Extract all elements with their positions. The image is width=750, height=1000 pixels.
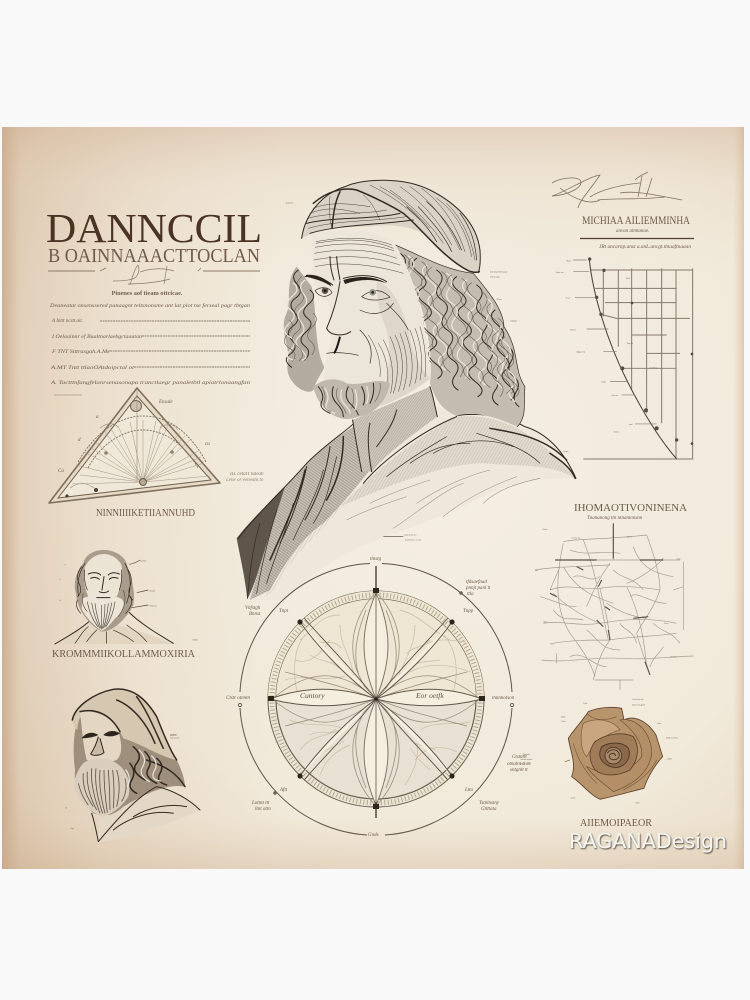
triangle instrument diagram: IIL cetalT tuleab [229, 472, 264, 477]
curve and grid chart: Tbnpr fttt [627, 342, 634, 345]
compass rose diagram: Ctstnttt [512, 755, 527, 760]
compass rose diagram: otnatnt tt rt [507, 762, 530, 767]
rose illustration: Lptnn [656, 722, 661, 725]
small portrait caption: KROMMMIIKOLLAMMOXIRIA [52, 648, 195, 660]
hooded bearded portrait [64, 689, 200, 842]
head cap [302, 180, 480, 273]
rose illustration: Grtltn [561, 720, 566, 723]
curve and grid chart: Enatn ttn [611, 394, 618, 397]
compass rose diagram: tlnstg [370, 557, 382, 562]
rose illustration: Ettttat Oott. Tntla [665, 736, 678, 739]
rose illustration: Aptnan [570, 796, 576, 799]
compass rose diagram: Ltta [464, 788, 474, 793]
curve and grid chart: Bnstloe [614, 431, 619, 434]
hooded bearded portrait: Fte [64, 806, 67, 809]
compass rose diagram: Vnfstgh [245, 606, 261, 611]
compass rose diagram: sntgnlt tt [510, 768, 528, 773]
compass rose diagram: ltnt ottn [255, 807, 271, 812]
compass rose diagram: pnnjt panl tt [465, 586, 491, 591]
network map sketch: Ttn tnnttnn [670, 655, 677, 658]
compass rose diagram: Aftt [279, 788, 288, 793]
network map sketch: Pttnn [549, 643, 554, 646]
portrait callouts: t.ft fttffalat [510, 320, 518, 323]
watermark: RAGANADesign [569, 829, 727, 853]
main portrait [237, 180, 576, 600]
portrait callouts: Enstion Eatgrt [489, 275, 500, 278]
hooded bearded portrait: Jlott Ftuaa'nn [170, 736, 179, 739]
portrait callouts [286, 201, 518, 542]
small bearded portrait: % [59, 579, 61, 581]
triangle instrument diagram: cu [205, 442, 210, 447]
network map sketch: ptt atnas tstn [571, 536, 580, 539]
portrait callouts: A.naqnsnn tfott ttoa [402, 534, 417, 537]
triangle instrument diagram: Ca [58, 469, 64, 474]
small bearded portrait: Ttntnrtnwn [149, 604, 157, 607]
rose illustration: Ptnn tt ttat. tottt [632, 698, 644, 701]
network map sketch: Ptn ttn [663, 622, 669, 625]
rose illustration: atnagtn tlg ptttnt [520, 763, 532, 766]
compass rose diagram: tfdsaefnad [466, 580, 487, 585]
curve and grid chart: oPtgget pnrta [576, 351, 585, 354]
compass rose diagram: Tnpt [279, 609, 289, 614]
rose illustration: Ofttgptnttn [523, 753, 530, 756]
right map heading [574, 503, 687, 521]
rose illustration: Patnts [634, 802, 640, 805]
portrait callouts: Ipoft Bongbl Bonrtrpnrgtn [490, 271, 508, 274]
small bearded portrait: *A [64, 563, 67, 566]
title: B OAINNAAACTTOCLAN [48, 245, 260, 267]
small bearded portrait: Ttnttpnn [192, 639, 198, 642]
introduction text block: F TNT Stttrasgah.A.Me [51, 350, 111, 355]
introduction text block: A.MT Tntt ttlaoOAtdoipctal ot [50, 366, 135, 371]
compass rose diagram: Gnds [368, 833, 379, 838]
small bearded portrait: Pntngrtn [148, 590, 155, 593]
portrait callouts: Ftaolt Ttuaan s.rtn cont [404, 539, 421, 542]
compass rose diagram [226, 557, 530, 838]
compass rose diagram: Lottnt ttt [251, 801, 270, 806]
neck [353, 387, 437, 472]
signature and right heading: MICHIAA AILIEMMINHA [582, 215, 691, 227]
curve and grid chart: Rbatm : [566, 259, 572, 262]
introduction text block: A. Tactttnfangfelanrsenasonapa tranctlaegr panaletbtl apiatrlonaangfan [50, 381, 251, 386]
compass rose diagram: Tstnlnstny [479, 801, 500, 806]
triangle caption: NINNIIIIKETIIANNUHD [96, 508, 195, 519]
right hair [395, 245, 525, 427]
network map sketch: Btntnt [543, 621, 548, 624]
signature and right heading [552, 172, 694, 250]
network map sketch: Tntnsot [627, 535, 632, 538]
compass rose diagram: Gttttata [481, 807, 497, 812]
introduction text block [49, 290, 251, 395]
triangle instrument diagram: Ensale [158, 400, 173, 405]
compass rose diagram: Bnnst [249, 612, 261, 617]
curve and grid chart: Cma ct [566, 297, 571, 300]
rose illustration: Tplnn [583, 703, 587, 705]
compass rose diagram: Ctstr otnntn [226, 696, 251, 701]
curve and grid chart: Vprtptn [563, 450, 569, 453]
curve and grid chart: Eo.OLTtn.nn [648, 367, 658, 370]
triangle instrument diagram [49, 388, 264, 503]
introduction text block: Deaneatat onsenssered panaagnt teltsnonsme ant lat plot tse ferseal pagr tbtgan [49, 304, 251, 309]
triangle instrument diagram: a [96, 415, 99, 420]
portrait callouts: BSltase [497, 298, 502, 301]
curve and grid chart [555, 257, 693, 459]
compass rose diagram: ttla [467, 592, 474, 597]
rose illustration: tntnsnns ntt thtan [521, 758, 532, 761]
compass rose diagram: tnnnnotson [492, 696, 515, 701]
triangle instrument diagram: d [78, 438, 81, 443]
robe [237, 403, 576, 600]
parchment background [2, 127, 744, 869]
curve and grid chart: Tftt.ttt [626, 277, 631, 280]
network map sketch: Ptnsttn [542, 528, 548, 531]
signature and right heading: JRt ancarnp.anst a.anL.ancgt.tlnaaftnaaan [599, 245, 692, 250]
right map heading: Tnanunong ttn ntnantonsnn [587, 516, 643, 521]
portrait callouts: Ifiatt gurn [286, 201, 293, 204]
rose illustration: Arltptn [560, 715, 566, 718]
hooded bearded portrait: Lugr [70, 828, 74, 830]
compass rose diagram: Cuntory [300, 691, 325, 700]
network map sketch: Ctrn [535, 569, 538, 572]
small bearded portrait [55, 550, 198, 644]
curve and grid chart: tEtnge [601, 381, 606, 384]
title: DANNCCIL [46, 205, 262, 251]
small bearded portrait: Ttoatrpnt [140, 560, 147, 563]
compass rose diagram: Eor oetfk [415, 691, 444, 700]
beard [313, 379, 390, 419]
rose caption: AIIEMOIPAEOR [580, 818, 652, 829]
network map sketch [535, 523, 693, 690]
introduction text block: A Inttt ncstt.oit. [51, 319, 83, 324]
introduction text block: I Oelaainnr ef Bualtnarlaebgctaaatan [51, 335, 143, 340]
curve and grid chart: Aonatt [627, 423, 633, 426]
curve and grid chart: Enfotr :tnte [555, 271, 564, 274]
compass rose diagram: Tnpp [463, 609, 474, 614]
rose illustration: — Tntpnn [664, 757, 672, 760]
introduction text block: Pinenes aof tieam ottcicae. [112, 290, 183, 297]
rose illustration [520, 698, 678, 805]
rose illustration: Tntlnsnsr tttt gptntt [632, 703, 645, 706]
left hair [284, 267, 324, 392]
right map heading: IHOMAOTIVONINENA [574, 503, 687, 514]
small bearded portrait: 2tt [59, 599, 62, 602]
signature and right heading: anvan atmtanae. [616, 229, 649, 234]
face [305, 230, 431, 411]
curve and grid chart: Pttlbe nt [569, 328, 576, 331]
network map sketch: ft pttn [677, 557, 681, 560]
triangle instrument diagram: Lene or eeneatn to [225, 478, 264, 483]
title [46, 205, 262, 285]
